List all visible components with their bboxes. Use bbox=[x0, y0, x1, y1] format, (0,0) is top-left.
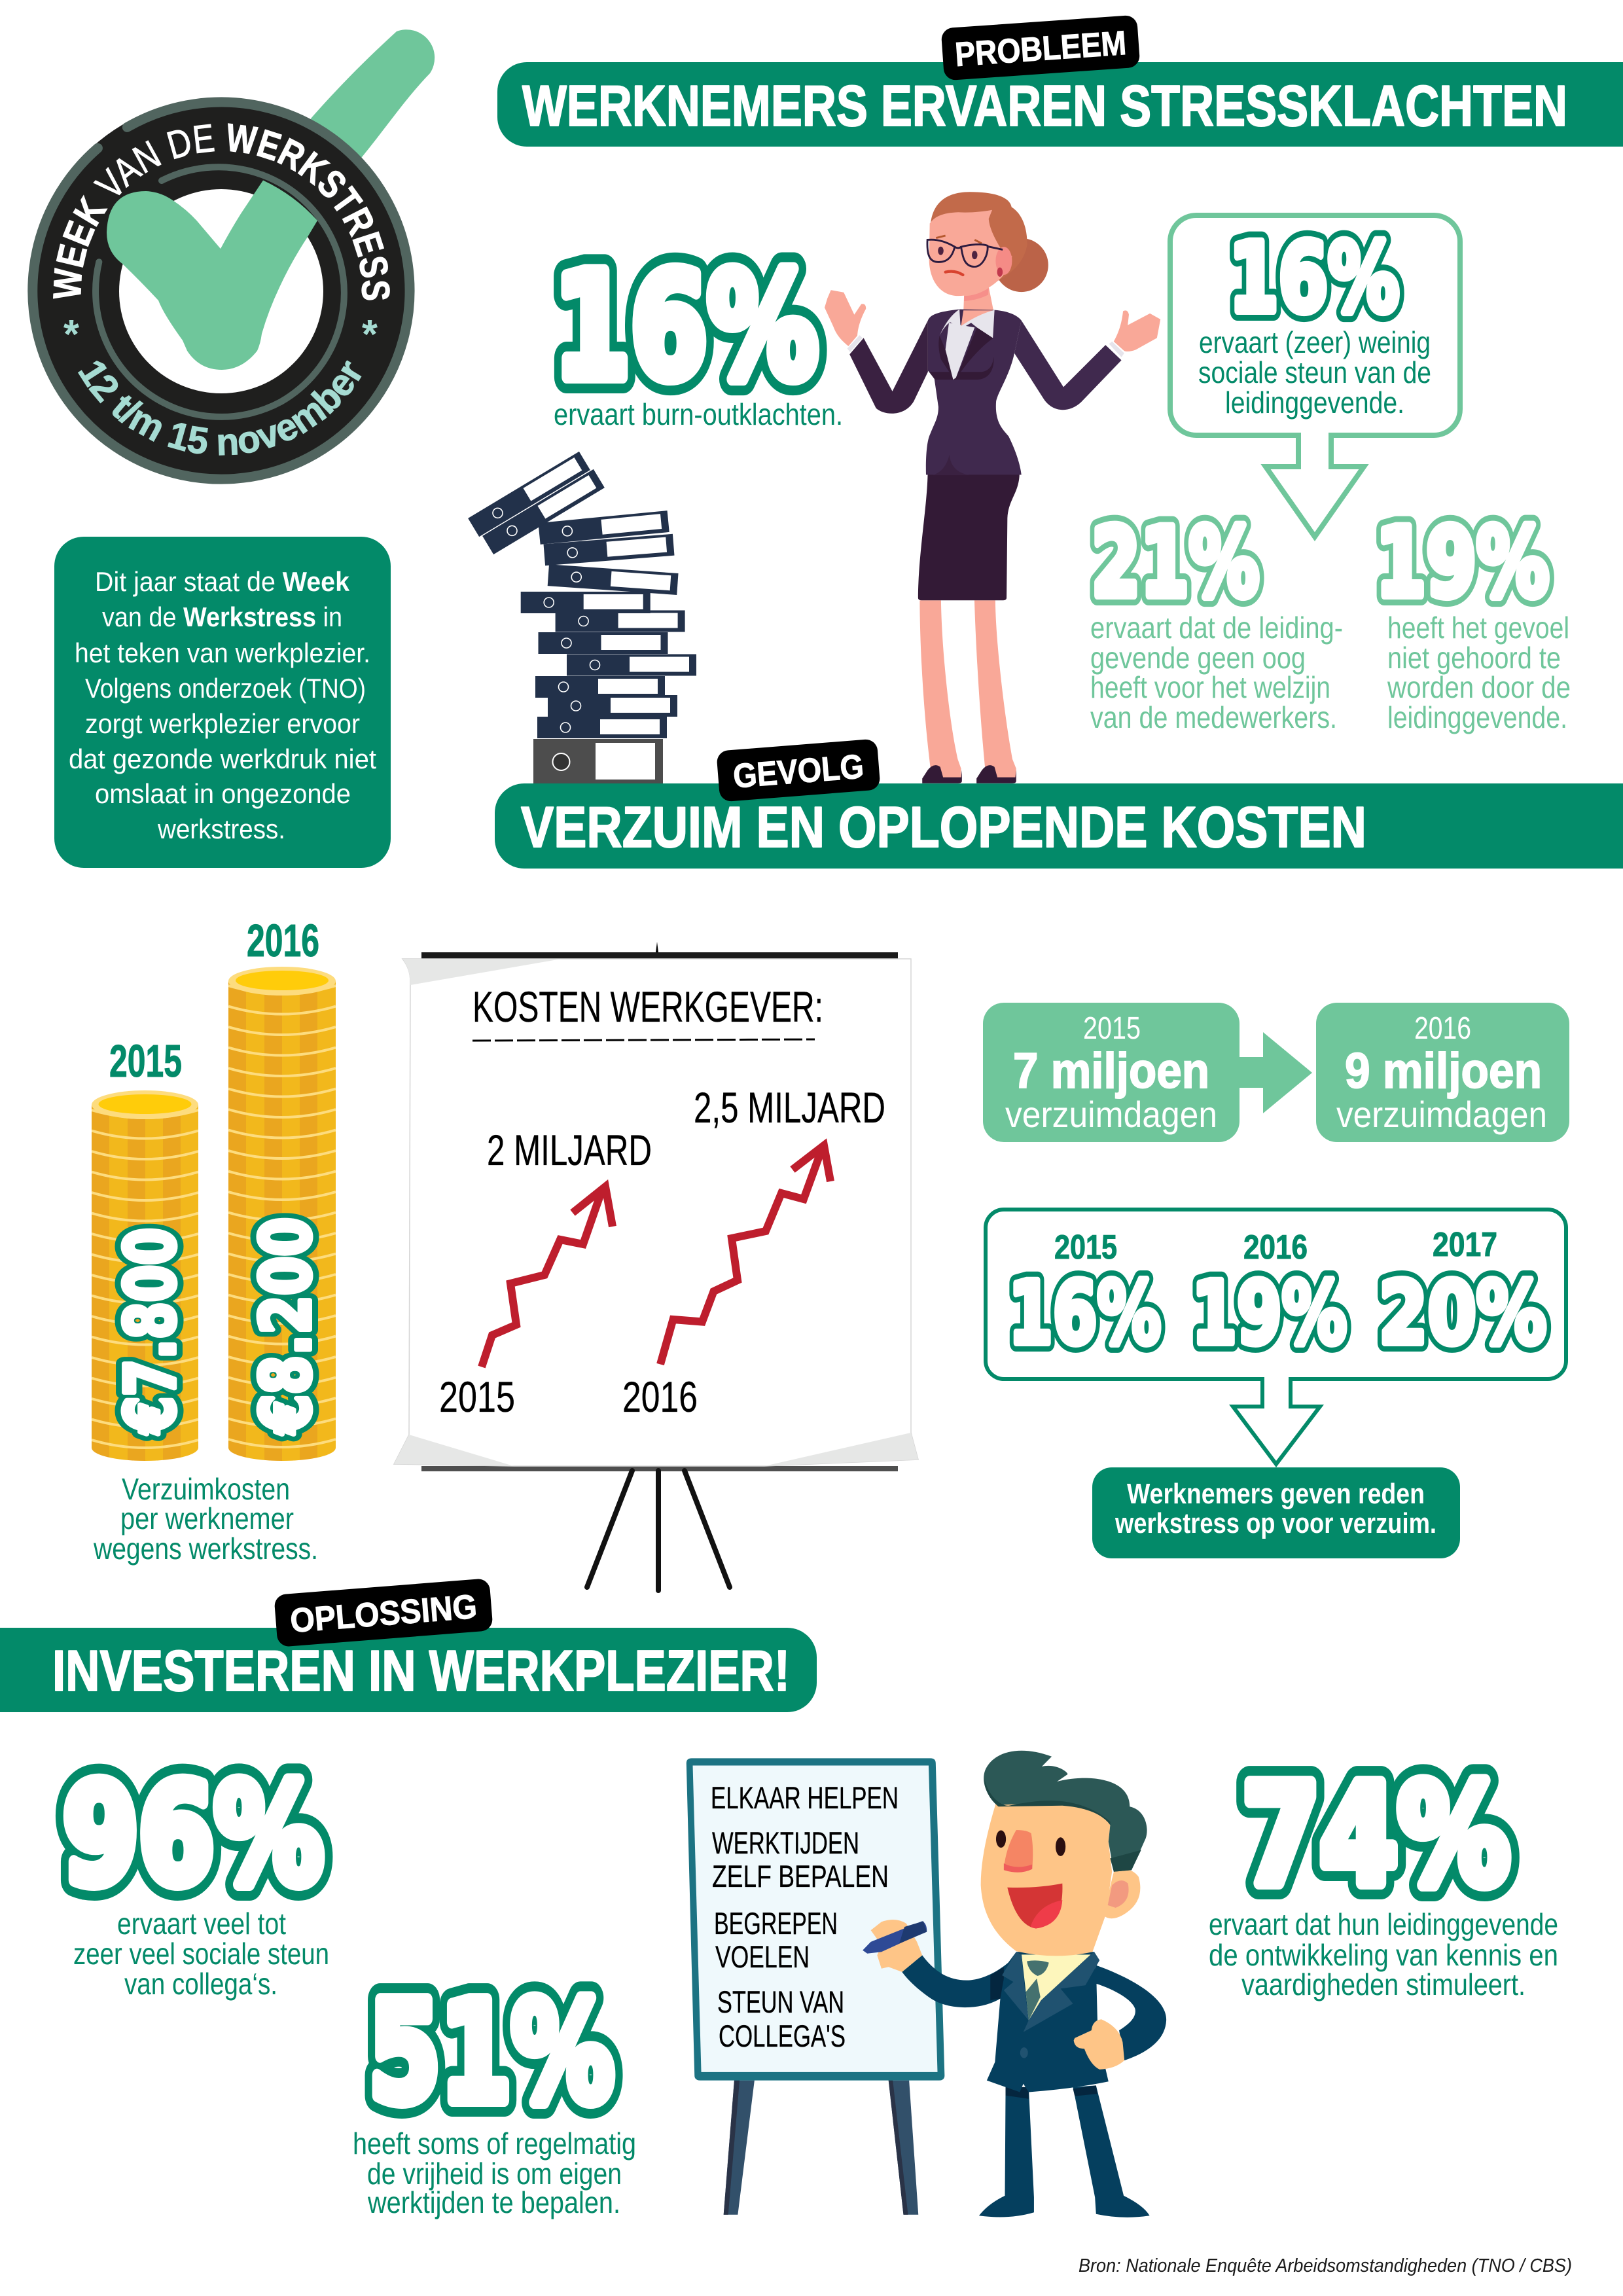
value: €8.200: €8.200 bbox=[246, 1217, 326, 1435]
panel: intro text: omslaat in ongezonde bbox=[95, 778, 351, 809]
illustration: stack of binders bbox=[468, 452, 696, 783]
whiteboard: werkplezier list: ELKAAR HELPEN bbox=[711, 1780, 899, 1815]
panel: intro text: zorgt werkplezier ervoor bbox=[85, 708, 360, 739]
panel: verzuimdagen 2016: verzuimdagen bbox=[1336, 1094, 1547, 1135]
panel: intro text: het teken van werkplezier. bbox=[75, 637, 370, 668]
panel: reden verzuim bbox=[1092, 1467, 1460, 1558]
callout: percentages 2015-2017: 20% bbox=[1379, 1263, 1546, 1364]
chart: coin stack 2015 bbox=[92, 1035, 198, 1461]
whiteboard: werkplezier list bbox=[687, 1758, 944, 2215]
tag: gevolg: GEVOLG bbox=[732, 747, 865, 796]
caption: verzuimkosten: wegens werkstress. bbox=[93, 1532, 318, 1566]
panel: verzuimdagen 2016 bbox=[1316, 1003, 1569, 1142]
panel: verzuimdagen 2016: 2016 bbox=[1414, 1011, 1471, 1046]
stat: 51%: 51% bbox=[369, 1972, 614, 2133]
stat: 51%: werktijden te bepalen. bbox=[367, 2185, 620, 2219]
flipchart: kosten werkgever: KOSTEN WERKGEVER: bbox=[473, 982, 823, 1031]
stat: 96%: zeer veel sociale steun bbox=[73, 1937, 329, 1971]
callout: percentages 2015-2017: 16% bbox=[1008, 1263, 1161, 1364]
stat: 74%: ervaart dat hun leidinggevende bbox=[1209, 1907, 1558, 1941]
panel: intro text: Volgens onderzoek (TNO) bbox=[85, 673, 366, 704]
stat: 74% bbox=[1209, 1755, 1558, 2001]
panel: verzuimdagen 2016: 9 miljoen bbox=[1345, 1043, 1542, 1099]
callout: 16% weinig sociale steun bbox=[1170, 215, 1460, 537]
panel: reden verzuim: Werknemers geven reden bbox=[1127, 1478, 1425, 1510]
heading bar: gevolg bbox=[495, 783, 1623, 869]
stat: 74%: 74% bbox=[1242, 1755, 1510, 1916]
caption: verzuimkosten: per werknemer bbox=[120, 1501, 294, 1535]
logo badge: Week van de Werkstress bbox=[27, 29, 435, 484]
panel: verzuimdagen 2015 bbox=[983, 1003, 1240, 1142]
callout: percentages 2015-2017: 2015 bbox=[1054, 1229, 1117, 1266]
illustration: stressed woman bbox=[825, 192, 1160, 783]
panel: verzuimdagen 2015: 2015 bbox=[1083, 1011, 1141, 1046]
callout: 16% weinig sociale steun: 16% bbox=[1229, 223, 1399, 334]
flipchart: kosten werkgever: 2,5 MILJARD bbox=[694, 1083, 885, 1132]
logo badge: Week van de Werkstress: * bbox=[63, 312, 80, 357]
heading bar: gevolg: VERZUIM EN OPLOPENDE KOSTEN bbox=[521, 795, 1366, 859]
logo badge: Week van de Werkstress: WEEK VAN DE WERKSTRESS bbox=[53, 123, 390, 300]
stat: 96%: ervaart veel tot bbox=[117, 1907, 286, 1941]
callout: percentages 2015-2017: 19% bbox=[1192, 1263, 1347, 1364]
tag: probleem: PROBLEEM bbox=[954, 24, 1128, 74]
heading bar: oplossing bbox=[0, 1628, 817, 1712]
whiteboard: werkplezier list: STEUN VAN bbox=[717, 1984, 844, 2019]
stat: 21% bbox=[1090, 507, 1343, 734]
value: €8.200: €8.200 bbox=[246, 1217, 326, 1435]
callout: percentages 2015-2017: 2016 bbox=[1243, 1229, 1308, 1266]
stat: 19%: niet gehoord te bbox=[1387, 641, 1561, 675]
stat: 96%: van collega‘s. bbox=[124, 1967, 277, 2001]
panel: verzuimdagen 2015: verzuimdagen bbox=[1005, 1094, 1217, 1135]
panel: intro text: van de Werkstress in bbox=[102, 601, 342, 632]
stat: 19%: leidinggevende. bbox=[1387, 700, 1567, 734]
callout: percentages 2015-2017: 19% bbox=[1192, 1263, 1347, 1364]
stat: 51%: heeft soms of regelmatig bbox=[353, 2126, 636, 2161]
tag: oplossing: OPLOSSING bbox=[289, 1588, 478, 1640]
illustration: happy man with marker bbox=[863, 1751, 1166, 2217]
panel: verzuimdagen 2015: 7 miljoen bbox=[1013, 1043, 1209, 1099]
stat: 16% burn-out: 16% bbox=[554, 242, 818, 412]
stat: 19% bbox=[1376, 507, 1571, 734]
whiteboard: werkplezier list: VOELEN bbox=[715, 1939, 810, 1974]
stat: 21%: heeft voor het welzijn bbox=[1090, 670, 1330, 704]
stat: 96%: 96% bbox=[63, 1754, 323, 1915]
chart: coin stack 2016: 2016 bbox=[247, 915, 319, 966]
stat: 51%: de vrijheid is om eigen bbox=[367, 2157, 622, 2191]
callout: 16% weinig sociale steun: 16% bbox=[1229, 223, 1399, 334]
stat: 96%: 96% bbox=[63, 1754, 323, 1915]
stat: 19%: 19% bbox=[1376, 507, 1549, 619]
callout: 16% weinig sociale steun: ervaart (zeer) weinig bbox=[1199, 325, 1431, 359]
chart: coin stack 2016 bbox=[228, 915, 336, 1461]
panel: reden verzuim: werkstress op voor verzuim. bbox=[1115, 1507, 1436, 1539]
whiteboard: werkplezier list: WERKTIJDEN bbox=[712, 1825, 859, 1860]
logo badge: Week van de Werkstress: 12 t/m 15 november bbox=[77, 360, 361, 456]
stat: 74%: vaardigheden stimuleert. bbox=[1241, 1967, 1525, 2001]
logo badge: Week van de Werkstress: * bbox=[362, 312, 378, 357]
heading bar: oplossing: INVESTEREN IN WERKPLEZIER! bbox=[52, 1638, 790, 1703]
value: €7.800: €7.800 bbox=[111, 1228, 190, 1435]
tag: gevolg bbox=[716, 738, 881, 802]
whiteboard: werkplezier list: BEGREPEN bbox=[714, 1906, 838, 1941]
stat: 21%: 21% bbox=[1092, 507, 1259, 619]
callout: percentages 2015-2017: 16% bbox=[1008, 1263, 1161, 1364]
callout: percentages 2015-2017 bbox=[986, 1210, 1566, 1464]
stat: 96% bbox=[63, 1754, 329, 2001]
arrow: 2015 to 2016 bbox=[1240, 1032, 1312, 1113]
stat: 74%: 74% bbox=[1242, 1755, 1510, 1916]
chart: coin stack 2015: 2015 bbox=[109, 1035, 182, 1086]
callout: 16% weinig sociale steun: sociale steun van de bbox=[1198, 355, 1431, 389]
stat: 21%: 21% bbox=[1092, 507, 1259, 619]
callout: percentages 2015-2017: 2017 bbox=[1433, 1226, 1497, 1264]
stat: 51%: 51% bbox=[369, 1972, 614, 2133]
stat: 19%: heeft het gevoel bbox=[1387, 611, 1569, 645]
callout: percentages 2015-2017: 20% bbox=[1379, 1263, 1546, 1364]
flipchart: kosten werkgever: 2016 bbox=[622, 1372, 698, 1421]
stat: 51% bbox=[353, 1972, 636, 2219]
whiteboard: werkplezier list: ZELF BEPALEN bbox=[712, 1859, 889, 1893]
stat: 16% burn-out: ervaart burn-outklachten. bbox=[554, 397, 843, 431]
stat: 16% burn-out: 16% bbox=[554, 242, 818, 412]
panel: intro text bbox=[54, 537, 391, 868]
stat: 21%: van de medewerkers. bbox=[1090, 700, 1337, 734]
value: €7.800: €7.800 bbox=[111, 1228, 190, 1435]
panel: intro text: Dit jaar staat de Week bbox=[95, 566, 350, 597]
stat: 74%: de ontwikkeling van kennis en bbox=[1209, 1938, 1558, 1972]
panel: intro text: werkstress. bbox=[157, 814, 285, 844]
stat: 19%: worden door de bbox=[1387, 670, 1571, 704]
flipchart: kosten werkgever bbox=[394, 942, 918, 1590]
caption: verzuimkosten: Verzuimkosten bbox=[122, 1472, 290, 1506]
flipchart: kosten werkgever: 2 MILJARD bbox=[487, 1126, 652, 1174]
callout: 16% weinig sociale steun: leidinggevende. bbox=[1225, 386, 1404, 420]
stat: 21%: gevende geen oog bbox=[1090, 641, 1306, 675]
whiteboard: werkplezier list: COLLEGA'S bbox=[719, 2018, 846, 2053]
panel: intro text: dat gezonde werkdruk niet bbox=[69, 744, 376, 774]
stat: 19%: 19% bbox=[1376, 507, 1549, 619]
caption: verzuimkosten bbox=[93, 1472, 318, 1566]
stat: 21%: ervaart dat de leiding- bbox=[1090, 611, 1343, 645]
flipchart: kosten werkgever: 2015 bbox=[439, 1372, 515, 1421]
source note: Bron: Nationale Enquête Arbeidsomstandigheden (TNO / CBS) bbox=[1079, 2255, 1572, 2276]
